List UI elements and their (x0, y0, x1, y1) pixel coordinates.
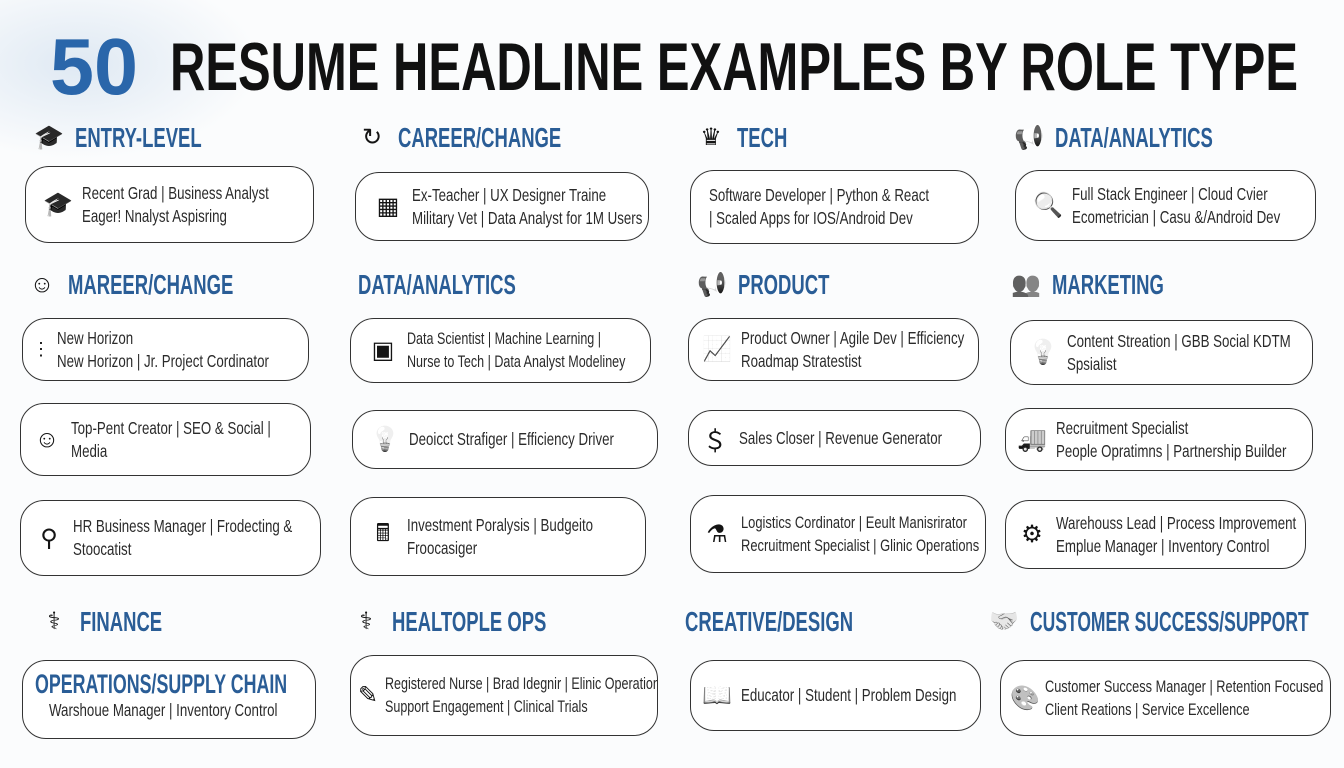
box: data analytics: 🔍 (1033, 192, 1063, 219)
background wash (0, 0, 260, 160)
box: logistics: Recruitment Specialist | Glinic Operations (741, 536, 979, 555)
text: 🤝 (989, 608, 1019, 635)
box: health: Registered Nurse | Brad Idegnir | Elinic Operation (385, 674, 658, 692)
box: operations supply chain: OPERATIONS/SUPPLY CHAIN (35, 669, 287, 699)
text: ↻ (362, 124, 382, 151)
box: sales (688, 410, 981, 466)
heading: tech: TECH (737, 122, 787, 153)
box: new horizon: New Horizon (57, 328, 133, 348)
box: data scientist: ▣ (372, 337, 394, 364)
box: data analytics: Full Stack Engineer | Cloud Cvier (1072, 184, 1268, 204)
box: investment: 🖩 (376, 520, 390, 547)
heading: healtople ops: HEALTOPLE OPS (392, 606, 546, 637)
box: career change: Military Vet | Data Analyst for 1M Users (412, 208, 642, 228)
box: operations supply chain: Warshoue Manager | Inventory Control (49, 700, 277, 720)
box: creative: 📖 (702, 682, 732, 709)
box: data scientist: Nurse to Tech | Data Analyst Modeliney (407, 352, 625, 370)
box: strategist: Deoicct Strafiger | Efficiency Driver (409, 429, 614, 449)
box: entry-level: Eager! Nnalyst Aspisring (82, 206, 227, 226)
box: recruitment (1005, 408, 1313, 471)
box: marketing: 💡 (1028, 339, 1058, 366)
heading: finance: FINANCE (80, 606, 162, 637)
heading: marketing: MARKETING (1052, 269, 1164, 300)
text: 📢 (1014, 124, 1044, 151)
text: ☺ (30, 271, 54, 298)
text: 👥 (1011, 271, 1041, 298)
box: marketing (1010, 320, 1313, 385)
box: logistics: Logistics Cordinator | Eeult Manisrirator (741, 513, 967, 532)
box: hr (20, 500, 321, 576)
box: tech: Software Developer | Python & React (709, 185, 929, 205)
box: warehouse (1005, 500, 1306, 569)
box: logistics: ⚗ (706, 520, 728, 548)
box: health: ✎ (358, 682, 378, 709)
box: health: Support Engagement | Clinical Trials (385, 698, 588, 716)
heading: career change: CAREER/CHANGE (398, 122, 561, 153)
box: creator: ☺ (35, 426, 59, 452)
box: entry-level: Recent Grad | Business Analyst (82, 182, 269, 202)
text: 🎓 (34, 124, 64, 151)
box: customer success: Client Reations | Service Excellence (1045, 700, 1250, 719)
text: ⚕ (48, 608, 60, 635)
box: investment: Froocasiger (407, 538, 477, 558)
box: recruitment: People Opratimns | Partnership Builder (1056, 440, 1286, 460)
box: hr: HR Business Manager | Frodecting & (73, 516, 292, 536)
box: product: Roadmap Stratestist (741, 350, 861, 370)
box: creator (20, 403, 311, 476)
heading: customer success: CUSTOMER SUCCESS/SUPPORT (1030, 606, 1309, 637)
box: warehouse: ⚙ (1021, 521, 1043, 548)
heading: creative design: CREATIVE/DESIGN (685, 606, 853, 637)
box: creator: Media (71, 440, 107, 460)
box: marketing: Content Streation | GBB Social KDTM (1067, 330, 1291, 350)
box: new horizon: ⋮ (32, 339, 50, 359)
text: ⚕ (360, 608, 372, 635)
box: new horizon (22, 318, 309, 381)
box: entry-level (25, 166, 314, 243)
text: ♛ (700, 124, 722, 151)
box: new horizon: New Horizon | Jr. Project Cordinator (57, 350, 269, 370)
box: data scientist (350, 318, 651, 383)
box: sales: ＄ (703, 428, 727, 454)
box: logistics (690, 495, 986, 573)
box: product (688, 318, 979, 381)
box: hr: ⚲ (40, 524, 58, 552)
box: operations supply chain (22, 660, 316, 739)
box: product: Product Owner | Agile Dev | Efficiency (741, 328, 964, 348)
box: data analytics: Ecometrician | Casu &/Android Dev (1072, 206, 1280, 226)
box: data scientist: Data Scientist | Machine Learning | (407, 330, 601, 348)
heading: data analytics: DATA/ANALYTICS (1055, 122, 1213, 153)
box: creative (690, 660, 981, 731)
box: customer success: 🎨 (1010, 684, 1040, 712)
title: 50 (50, 22, 138, 110)
box: customer success (1000, 660, 1331, 736)
text: 📢 (697, 271, 727, 298)
heading: data analytics 2: DATA/ANALYTICS (358, 269, 516, 300)
heading: entry-level: ENTRY-LEVEL (75, 122, 202, 153)
box: data analytics (1015, 170, 1316, 241)
box: tech: | Scaled Apps for IOS/Android Dev (709, 208, 913, 228)
heading: product: PRODUCT (738, 269, 829, 300)
box: hr: Stoocatist (73, 539, 131, 559)
heading: product (697, 269, 830, 300)
box: strategist: 💡 (370, 426, 400, 453)
box: marketing: Spsialist (1067, 354, 1117, 374)
box: health (350, 655, 658, 736)
box: warehouse: Emplue Manager | Inventory Control (1056, 536, 1269, 556)
box: career change: ▦ (377, 193, 399, 220)
box: product: 📈 (702, 336, 732, 363)
box: recruitment: Recruitment Specialist (1056, 418, 1188, 438)
box: entry-level: 🎓 (43, 191, 73, 218)
heading: mareer change: MAREER/CHANGE (68, 269, 233, 300)
box: creative: Educator | Student | Problem Design (741, 685, 956, 705)
box: customer success: Customer Success Manager | Retention Focused (1045, 677, 1323, 696)
box: tech (690, 170, 979, 244)
box: warehouse: Warehouss Lead | Process Improvement (1056, 512, 1296, 532)
heading: tech (700, 122, 787, 153)
box: career change (355, 172, 649, 241)
box: sales: Sales Closer | Revenue Generator (739, 428, 942, 448)
box: career change: Ex-Teacher | UX Designer Traine (412, 184, 606, 204)
box: investment (350, 497, 646, 576)
box: investment: Investment Poralysis | Budgeito (407, 514, 593, 534)
box: creator: Top-Pent Creator | SEO & Social | (71, 418, 271, 438)
box: recruitment: 🚚 (1017, 426, 1047, 453)
box: strategist (352, 410, 658, 469)
